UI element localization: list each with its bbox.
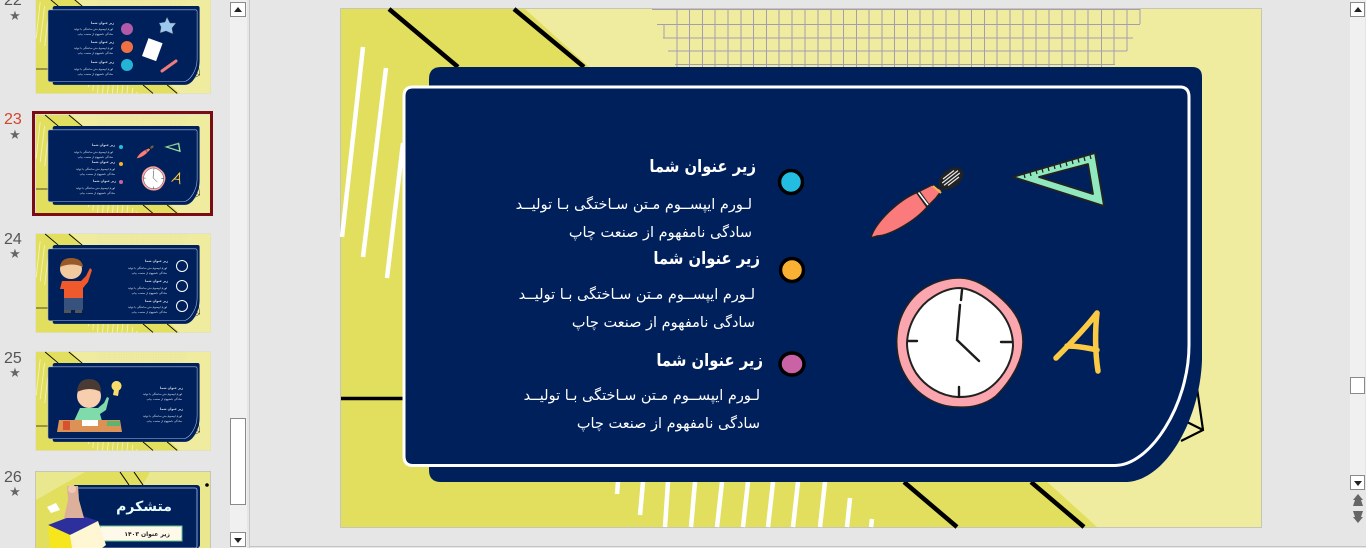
thumbnail: slide 23: سادگی نامفهوم از صنعت چاپ xyxy=(80,191,116,196)
thumbnail: slide 25: لورم ایپسوم متن ساختگی با تولید xyxy=(143,392,182,397)
thumbnail: slide 25 xyxy=(36,352,211,451)
text block: item 2 xyxy=(519,248,760,331)
text block: item 3 xyxy=(524,350,763,432)
thumbnail: slide 26: ۱۴۰۳ xyxy=(124,531,139,538)
thumbnail star 23: ★ xyxy=(9,128,21,143)
thumbnail number 26: 26 xyxy=(4,469,22,486)
thumbnail: slide 23: زیر عنوان شما xyxy=(92,160,115,164)
thumbnail: slide 22: سادگی نامفهوم از صنعت چاپ xyxy=(78,32,114,37)
thumbnail star 22: ★ xyxy=(9,9,21,24)
panel: right scrollbar xyxy=(1350,0,1365,523)
thumbnail number 24: 24 xyxy=(4,231,22,248)
thumbnail: slide 25: لورم ایپسوم متن ساختگی با تولید xyxy=(143,414,182,419)
thumbnail: slide 24: سادگی نامفهوم از صنعت چاپ xyxy=(132,291,168,296)
thumbnail: slide 24 xyxy=(36,234,211,333)
icon: set square xyxy=(1013,153,1104,206)
thumbnail: slide 24: سادگی نامفهوم از صنعت چاپ xyxy=(132,271,168,276)
thumbnail number 23: 23 xyxy=(4,111,22,128)
thumbnail: slide 23: سادگی نامفهوم از صنعت چاپ xyxy=(80,172,116,177)
icon: clock xyxy=(897,278,1023,407)
thumbnail: slide 23: سادگی نامفهوم از صنعت چاپ xyxy=(78,155,114,160)
icon: letter A xyxy=(1056,313,1098,371)
thumbnail: slide 23: لورم ایپسوم متن ساختگی با تولید xyxy=(74,150,113,155)
thumbnail: slide 22: زیر عنوان شما xyxy=(91,21,114,25)
grid pattern top xyxy=(652,9,1140,67)
body: item 2: سادگی نامفهوم از صنعت چاپ xyxy=(572,314,755,331)
heading: item 2: زیر عنوان شما xyxy=(653,248,760,268)
thumbnail: slide 25: سادگی نامفهوم از صنعت چاپ xyxy=(147,419,183,424)
thumbnail: slide 22: سادگی نامفهوم از صنعت چاپ xyxy=(78,51,114,56)
thumbnail: slide 25: زیر عنوان شما xyxy=(160,386,183,390)
thumbnail: slide 26: زیر عنوان xyxy=(141,531,171,538)
body: item 3: لـورم ایپســوم مـتن سـاختگی بـا تولیــد xyxy=(524,387,760,404)
heading: item 3: زیر عنوان شما xyxy=(656,350,763,370)
thumbnail star 26: ★ xyxy=(9,485,21,500)
thumbnail: slide 23: لورم ایپسوم متن ساختگی با تولید xyxy=(76,167,115,172)
icon: blue dot xyxy=(780,170,802,194)
icon: paintbrush xyxy=(871,163,968,237)
thumbnail: slide 23 xyxy=(34,112,212,214)
thumbnail: slide 22: زیر عنوان شما xyxy=(91,60,114,64)
body: item 1: سادگی نامفهوم از صنعت چاپ xyxy=(569,224,752,241)
thumbnail: slide 23: زیر عنوان شما xyxy=(92,143,115,147)
thumbnail: slide 22: لورم ایپسوم متن ساختگی با تولید xyxy=(74,27,113,32)
thumbnail: slide 26 xyxy=(36,472,210,548)
thumbnail: slide 24: لورم ایپسوم متن ساختگی با تولید xyxy=(128,266,167,271)
thumbnail number 25: 25 xyxy=(4,350,22,367)
thumbnail: slide 22 xyxy=(36,0,211,94)
thumbnail: slide 22: لورم ایپسوم متن ساختگی با تولید xyxy=(74,46,113,51)
thumbnail: slide 24: زیر عنوان شما xyxy=(145,299,168,303)
main slide background xyxy=(340,8,1262,528)
thumbnail: slide 24: لورم ایپسوم متن ساختگی با تولید xyxy=(128,305,167,310)
body: item 3: سادگی نامفهوم از صنعت چاپ xyxy=(577,415,760,432)
thumbnail: slide 22: لورم ایپسوم متن ساختگی با تولید xyxy=(74,67,113,72)
thumbnail: slide 24: لورم ایپسوم متن ساختگی با تولید xyxy=(128,286,167,291)
thumbnail: slide 25: زیر عنوان شما xyxy=(160,407,183,411)
thumbnail: slide 24: زیر عنوان شما xyxy=(145,259,168,263)
text block: item 1 xyxy=(516,156,756,241)
thumbnail star 24: ★ xyxy=(9,247,21,262)
thumbnail: slide 23: زیر عنوان شما xyxy=(93,179,116,183)
body: item 2: لـورم ایپســوم مـتن سـاختگی بـا تولیــد xyxy=(519,286,755,303)
thumbnail: slide 24: زیر عنوان شما xyxy=(145,279,168,283)
thumbnail star 25: ★ xyxy=(9,366,21,381)
heading: item 1: زیر عنوان شما xyxy=(649,156,756,176)
thumbnail: slide 25: سادگی نامفهوم از صنعت چاپ xyxy=(147,397,183,402)
thumbnail: slide 23: لورم ایپسوم متن ساختگی با تولید xyxy=(76,186,115,191)
body: item 1: لـورم ایپســوم مـتن سـاختگی بـا تولیــد xyxy=(516,196,752,213)
thumbnail: slide 22: زیر عنوان شما xyxy=(91,40,114,44)
thumbnail: slide 24: سادگی نامفهوم از صنعت چاپ xyxy=(132,310,168,315)
icon: pink dot xyxy=(780,353,804,375)
thumbnail: slide 26: متشکرم xyxy=(116,499,172,515)
icon: yellow dot xyxy=(780,258,804,282)
thumbnail: slide 22: سادگی نامفهوم از صنعت چاپ xyxy=(78,72,114,77)
